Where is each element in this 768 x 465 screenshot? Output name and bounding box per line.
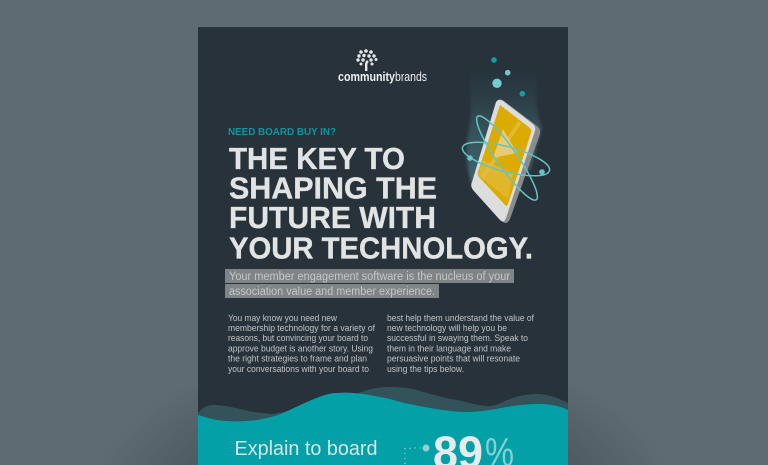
phone screen <box>478 105 531 206</box>
intro text column 1: reasons, but convincing your board to <box>228 332 368 343</box>
logo wordmark: community <box>338 70 395 84</box>
highlighted subtitle: Your member engagement software is the nucleus of your <box>229 271 510 283</box>
intro text column 1: membership technology for a variety of <box>228 322 375 333</box>
intro text column 2: new technology will help you be <box>387 322 507 333</box>
lower light band <box>478 160 513 199</box>
back wave <box>198 387 568 425</box>
title <box>229 141 533 266</box>
intro text column 1: You may know you need new <box>228 312 337 323</box>
title: SHAPING THE <box>229 170 437 206</box>
floating dots <box>491 57 525 96</box>
eyebrow: NEED BOARD BUY IN? <box>228 127 336 138</box>
intro text column 1: the right strategies to frame and plan <box>228 352 367 364</box>
logo wordmark: brands <box>395 70 427 84</box>
section heading: Explain to board <box>234 437 378 460</box>
intro text column 1: approve budget is another story. Using <box>228 342 373 354</box>
poster shadow <box>83 340 683 465</box>
intro text column 2: them in their language and make <box>387 342 511 354</box>
diagonal light stripe <box>482 122 520 178</box>
intro text column 1 <box>228 312 375 374</box>
poster panel <box>198 27 568 465</box>
logo: community brands <box>338 49 427 84</box>
intro text column 2: persuasive points that will resonate <box>387 352 520 364</box>
atom orbits <box>459 110 553 206</box>
stat connector dots <box>404 444 430 464</box>
intro text column 2: best help them understand the value of <box>387 312 534 323</box>
teal wave section <box>198 393 568 465</box>
title: THE KEY TO <box>229 141 405 176</box>
intro text column 2: successful in swaying them. Speak to <box>387 332 528 343</box>
highlighted subtitle: association value and member experience. <box>229 286 435 298</box>
orbit nodes <box>467 155 473 161</box>
section content <box>236 436 513 465</box>
intro text column 2 <box>387 312 534 374</box>
title: YOUR TECHNOLOGY. <box>229 230 533 266</box>
phone body <box>472 100 540 223</box>
icon: tree <box>356 49 378 71</box>
glow behind phone <box>466 68 542 186</box>
phone illustration <box>459 57 553 223</box>
intro text column 2: using the tips below. <box>387 363 464 374</box>
stat: 89% <box>434 436 513 465</box>
play triangle <box>493 129 517 158</box>
highlighted subtitle <box>225 269 514 298</box>
title: FUTURE WITH <box>229 200 436 235</box>
intro text column 1: your conversations with your board to <box>228 363 369 374</box>
